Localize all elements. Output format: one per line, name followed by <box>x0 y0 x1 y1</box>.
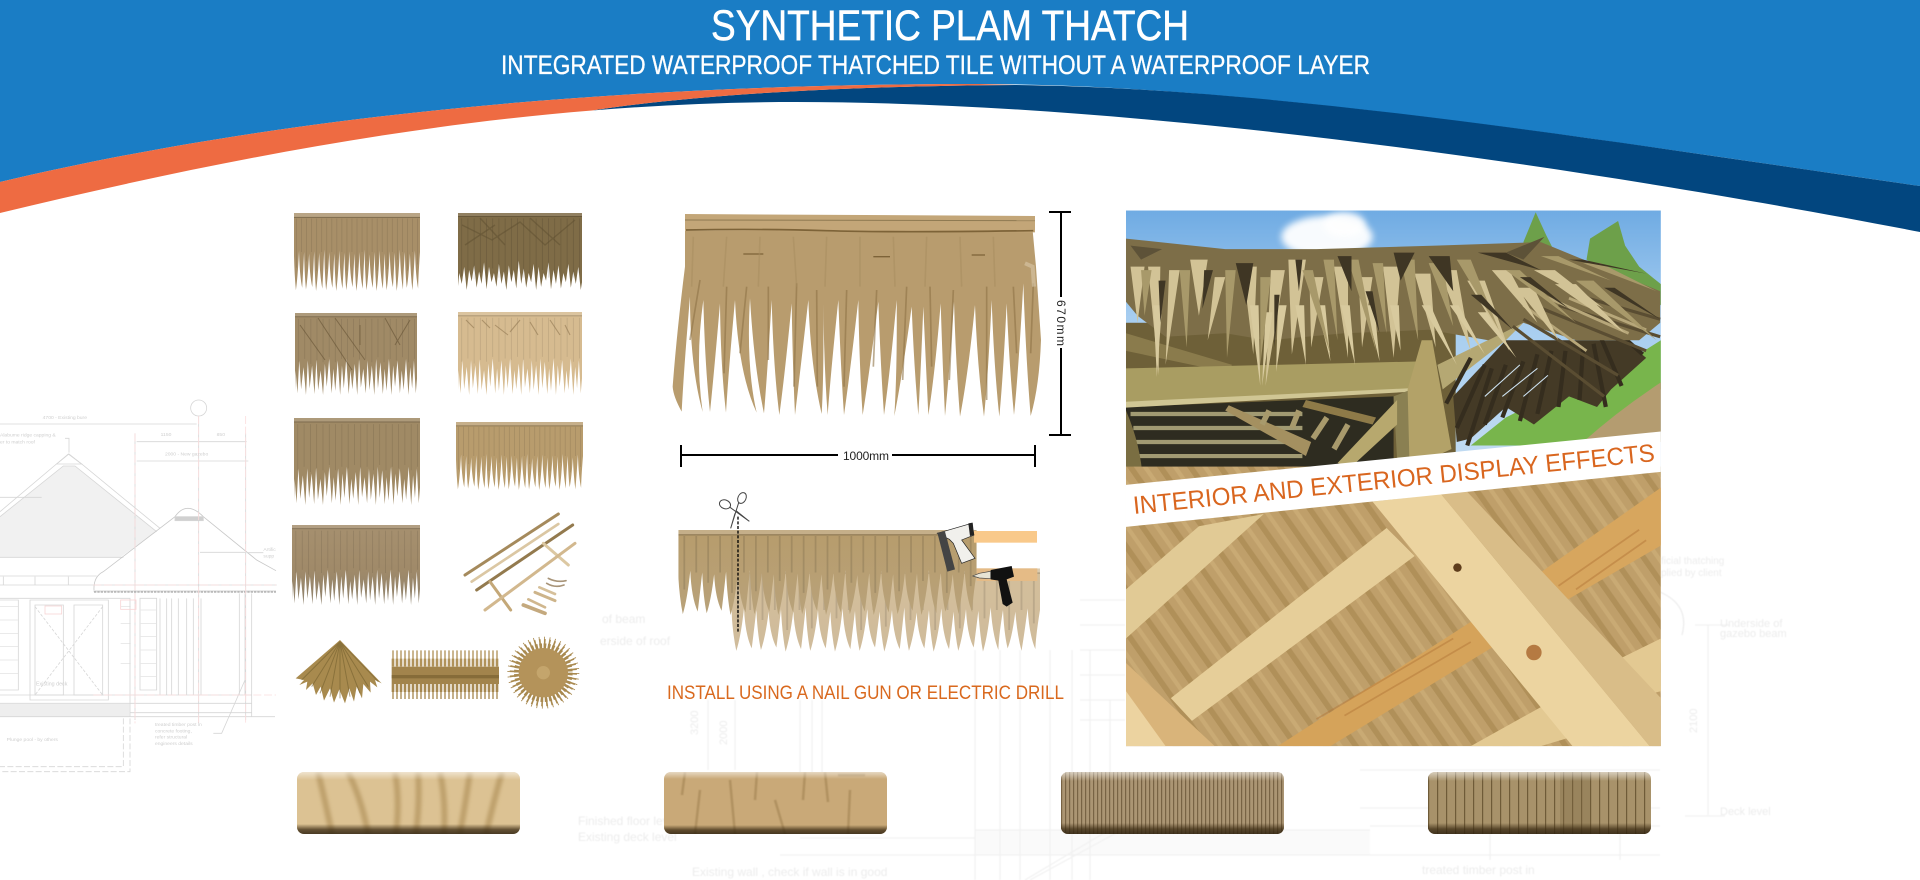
big tile illustration <box>673 214 1041 417</box>
background: faint architectural blueprint, left: engineers details <box>155 741 193 747</box>
subtitle: INTEGRATED WATERPROOF THATCHED TILE WITHOUT A WATERPROOF LAYER <box>501 50 1370 80</box>
lower overlapping tile <box>732 568 1040 652</box>
background: faint architectural blueprint, centre and right: Deck level <box>1720 806 1771 818</box>
background: faint architectural blueprint, left: 2000 - New gazebo <box>165 452 208 458</box>
background: faint architectural blueprint, left: Plunge pool - by others <box>7 737 58 743</box>
background: faint architectural blueprint, left: refer structural <box>155 735 187 741</box>
icon: nail gun <box>937 523 975 572</box>
background: faint architectural blueprint, centre and right: erside of roof <box>600 634 671 648</box>
background: faint architectural blueprint, centre and right: ficial thatching <box>1661 556 1724 567</box>
tile 2 <box>458 213 582 290</box>
photo: sky, clouds and foliage <box>1126 211 1661 477</box>
tile 5 <box>294 418 420 505</box>
blue header background <box>0 0 1920 186</box>
height dimension 670mm: 670mm <box>1054 300 1068 346</box>
dimensioned main tile <box>673 212 1071 467</box>
background: faint architectural blueprint, left: treated timber post in <box>155 722 202 728</box>
width dimension 1000mm: 1000mm <box>843 449 889 463</box>
swatch 1 <box>297 772 520 834</box>
material texture swatches <box>297 772 1651 834</box>
height dimension 670mm <box>1049 212 1071 435</box>
background: faint architectural blueprint, centre and right: Finished floor level <box>578 814 678 828</box>
cone ridge cap <box>296 640 382 703</box>
background: faint architectural blueprint, left: supp <box>263 553 274 559</box>
lower tile batten <box>977 568 1037 581</box>
background: faint architectural blueprint, centre and right: of beam <box>602 612 645 626</box>
navy swoosh <box>592 85 1920 232</box>
background: faint architectural blueprint, centre and right: Existing wall , check if wall is in good <box>692 865 887 879</box>
tile 7 <box>292 525 420 605</box>
install caption: INSTALL USING A NAIL GUN OR ELECTRIC DRILL <box>667 682 1064 704</box>
swatch 3 <box>1061 772 1284 834</box>
background: faint architectural blueprint, left: er to match roof <box>0 439 36 445</box>
background: faint architectural blueprint, centre and right: treated timber post in <box>1422 863 1535 877</box>
background: faint architectural blueprint, left <box>0 400 277 772</box>
display photo panel <box>1126 211 1661 747</box>
background: faint architectural blueprint, left: Existing deck <box>36 682 68 688</box>
white banner strip <box>1126 432 1661 527</box>
background: faint architectural blueprint, left: Artific <box>263 547 276 553</box>
background: faint architectural blueprint, centre and right <box>578 556 1787 880</box>
banner text: INTERIOR AND EXTERIOR DISPLAY EFFECTS <box>1132 439 1656 520</box>
product grid of thatch tiles <box>292 213 583 707</box>
background: faint architectural blueprint, centre and right: gazebo beam <box>1720 628 1787 640</box>
photo: gazebo framing under thatch <box>1126 322 1523 467</box>
background: faint architectural blueprint, left: concrete footing, <box>155 728 192 734</box>
tile 6 <box>456 422 583 490</box>
tile 4 <box>458 312 582 395</box>
background: faint architectural blueprint, centre and right: Underside of <box>1720 618 1783 630</box>
icon: electric drill <box>973 566 1014 607</box>
width dimension 1000mm <box>681 445 1035 467</box>
flat ridge bar <box>392 655 499 695</box>
installation illustration <box>667 491 1064 704</box>
background: faint architectural blueprint, centre and right: plied by client <box>1661 568 1722 579</box>
background: faint architectural blueprint, centre and right: 2100 <box>1688 709 1700 733</box>
background: faint architectural blueprint, centre and right: Existing deck level <box>578 830 677 844</box>
photo: wood ceiling <box>1126 467 1661 747</box>
main title: SYNTHETIC PLAM THATCH <box>711 2 1189 50</box>
background: faint architectural blueprint, left: 850 <box>217 432 225 438</box>
background: faint architectural blueprint, left: Alabume ridge capping & <box>0 433 56 439</box>
background: faint architectural blueprint, left: 4700 - Existing bure <box>43 415 87 421</box>
background: faint architectural blueprint, left: 1150 <box>161 432 172 438</box>
accessories: sticks and ridge pieces <box>465 514 575 613</box>
background: faint architectural blueprint, centre and right: 2000 <box>718 721 730 745</box>
photo: palm thatch <box>1126 237 1660 446</box>
tile 1 <box>294 213 420 291</box>
round sunburst cap <box>509 638 578 707</box>
tile 3 <box>295 313 417 395</box>
cut line <box>736 517 740 632</box>
swatch 4 <box>1428 772 1651 834</box>
orange swoosh <box>0 84 1016 213</box>
upper timber batten <box>974 531 1037 543</box>
upper overlapping tile <box>678 530 977 615</box>
swatch 2 <box>664 772 887 834</box>
header band with swoosh <box>0 0 1920 232</box>
background: faint architectural blueprint, centre and right: 3200 <box>689 711 701 735</box>
icon: scissors <box>718 491 749 528</box>
